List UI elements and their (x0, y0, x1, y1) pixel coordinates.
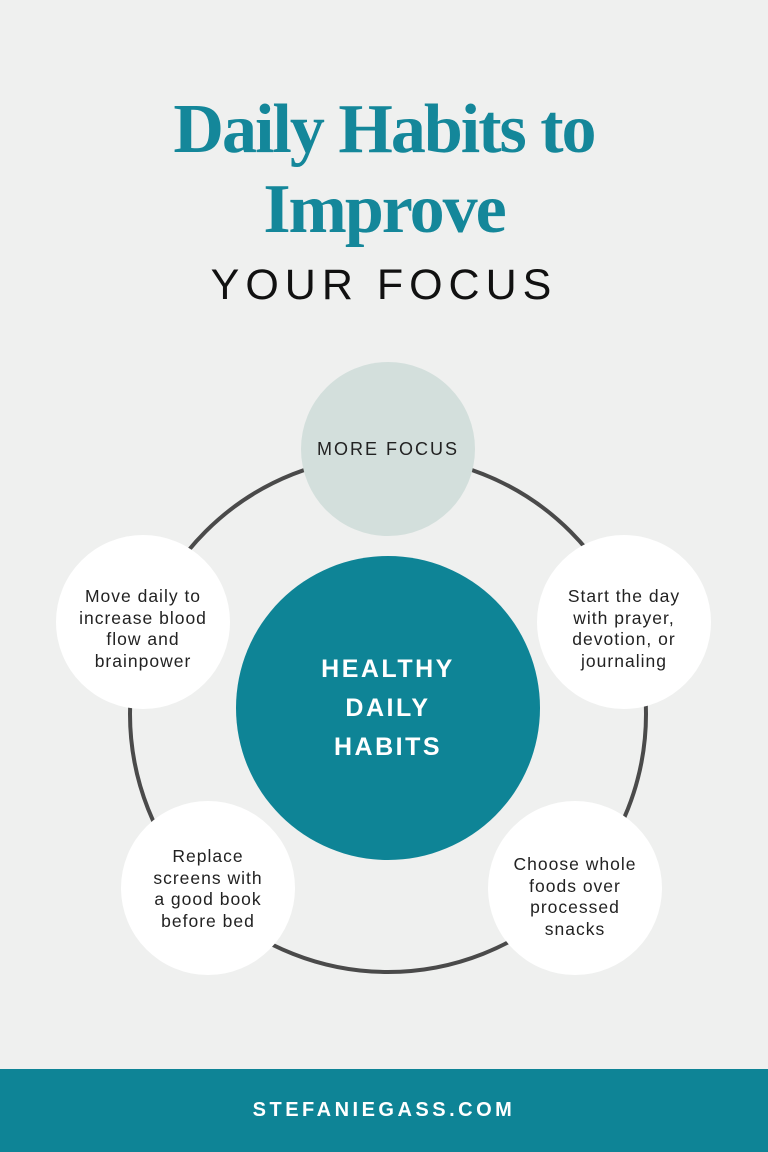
node: replace screens: before bed (161, 911, 255, 931)
node: start the day: devotion, or (572, 629, 676, 649)
node: start the day: journaling (580, 651, 667, 671)
node: replace screens: a good book (154, 889, 262, 909)
footer: STEFANIEGASS.COM (253, 1099, 515, 1121)
heading: Daily Habits to Improve: Improve (263, 171, 505, 248)
node: whole foods: Choose whole (514, 854, 636, 874)
center: healthy daily habits: HABITS (334, 733, 442, 761)
title (173, 91, 595, 309)
node: more focus (301, 362, 475, 536)
ring (130, 456, 646, 972)
node: replace screens: Replace (172, 846, 244, 866)
node: start the day: with prayer, (572, 608, 675, 628)
heading: Daily Habits to Improve: Daily Habits to (173, 91, 595, 168)
center: healthy daily habits (236, 556, 540, 860)
node: whole foods: foods over (529, 876, 621, 896)
node: replace screens: screens with (153, 868, 263, 888)
node: replace screens (121, 801, 295, 975)
node: start the day: Start the day (568, 586, 680, 606)
node: move daily: brainpower (95, 651, 191, 671)
node: move daily: increase blood (79, 608, 207, 628)
subheading: YOUR FOCUS: YOUR FOCUS (211, 261, 557, 309)
node: start the day (537, 535, 711, 709)
center: healthy daily habits: HEALTHY (321, 655, 455, 683)
footer (0, 1069, 768, 1152)
center: healthy daily habits: DAILY (345, 694, 431, 722)
heading: Daily Habits to Improve (173, 91, 595, 248)
node: whole foods: processed (530, 897, 620, 917)
node: move daily (56, 535, 230, 709)
node: move daily: Move daily to (85, 586, 201, 606)
node: whole foods: snacks (545, 919, 605, 939)
node: more focus: MORE FOCUS (317, 439, 459, 459)
node: move daily: flow and (106, 629, 180, 649)
node: whole foods (488, 801, 662, 975)
